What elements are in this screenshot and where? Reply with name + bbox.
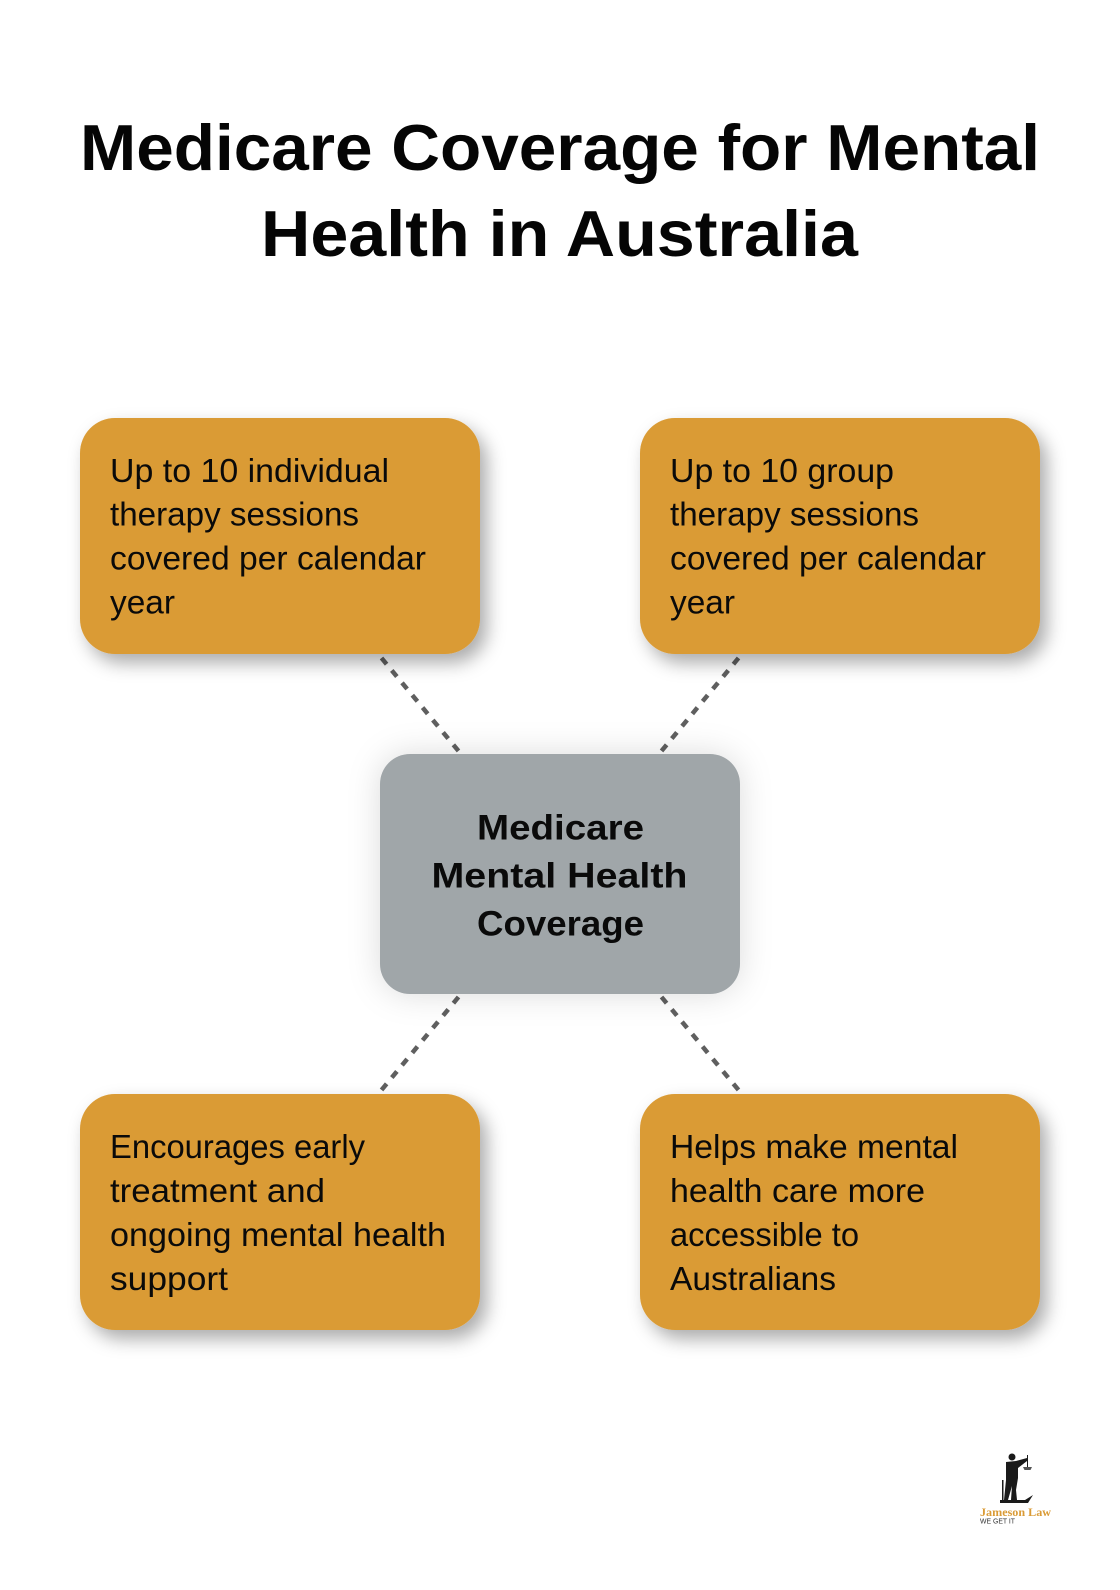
panel: early treatment: ongoing mental health [110,1217,446,1254]
connector: bottom right [662,997,738,1090]
panel: central topic [380,754,740,994]
panel: early treatment: Encourages early [110,1129,365,1166]
title: Medicare Coverage for Mental [80,112,1040,184]
panel: group therapy: Up to 10 group [670,453,894,490]
connector: top left [382,658,458,751]
panel: early treatment [80,1094,480,1330]
panel: group therapy: covered per calendar [670,540,986,578]
panel: accessibility [640,1094,1040,1330]
connector: top right [662,658,738,751]
logo: Jameson Law [980,1454,1051,1526]
panel: accessibility: health care more [670,1173,925,1210]
panel: group therapy [640,418,1040,654]
panel: group therapy: year [670,584,735,622]
panel: individual therapy [80,418,480,654]
panel: accessibility: accessible to [670,1217,859,1254]
panel: central topic: Medicare [477,808,644,848]
title [80,112,1040,270]
logo name: Jameson Law [980,1505,1051,1519]
logo tagline: WE GET IT [980,1518,1016,1526]
panel: individual therapy: Up to 10 individual [110,453,389,490]
title: Health in Australia [261,198,859,270]
panel: accessibility: Helps make mental [670,1129,958,1166]
panel: central topic: Coverage [477,904,644,944]
panel: early treatment: support [110,1261,229,1298]
panel: central topic: Mental Health [432,856,688,896]
panel: early treatment: treatment and [110,1173,325,1210]
panel: individual therapy: covered per calendar [110,540,426,578]
panel: group therapy: therapy sessions [670,496,919,534]
connector: bottom left [382,997,458,1090]
panel: individual therapy: year [110,584,175,622]
panel: individual therapy: therapy sessions [110,496,359,534]
icon: lady justice [1000,1454,1033,1503]
panel: accessibility: Australians [670,1261,836,1298]
